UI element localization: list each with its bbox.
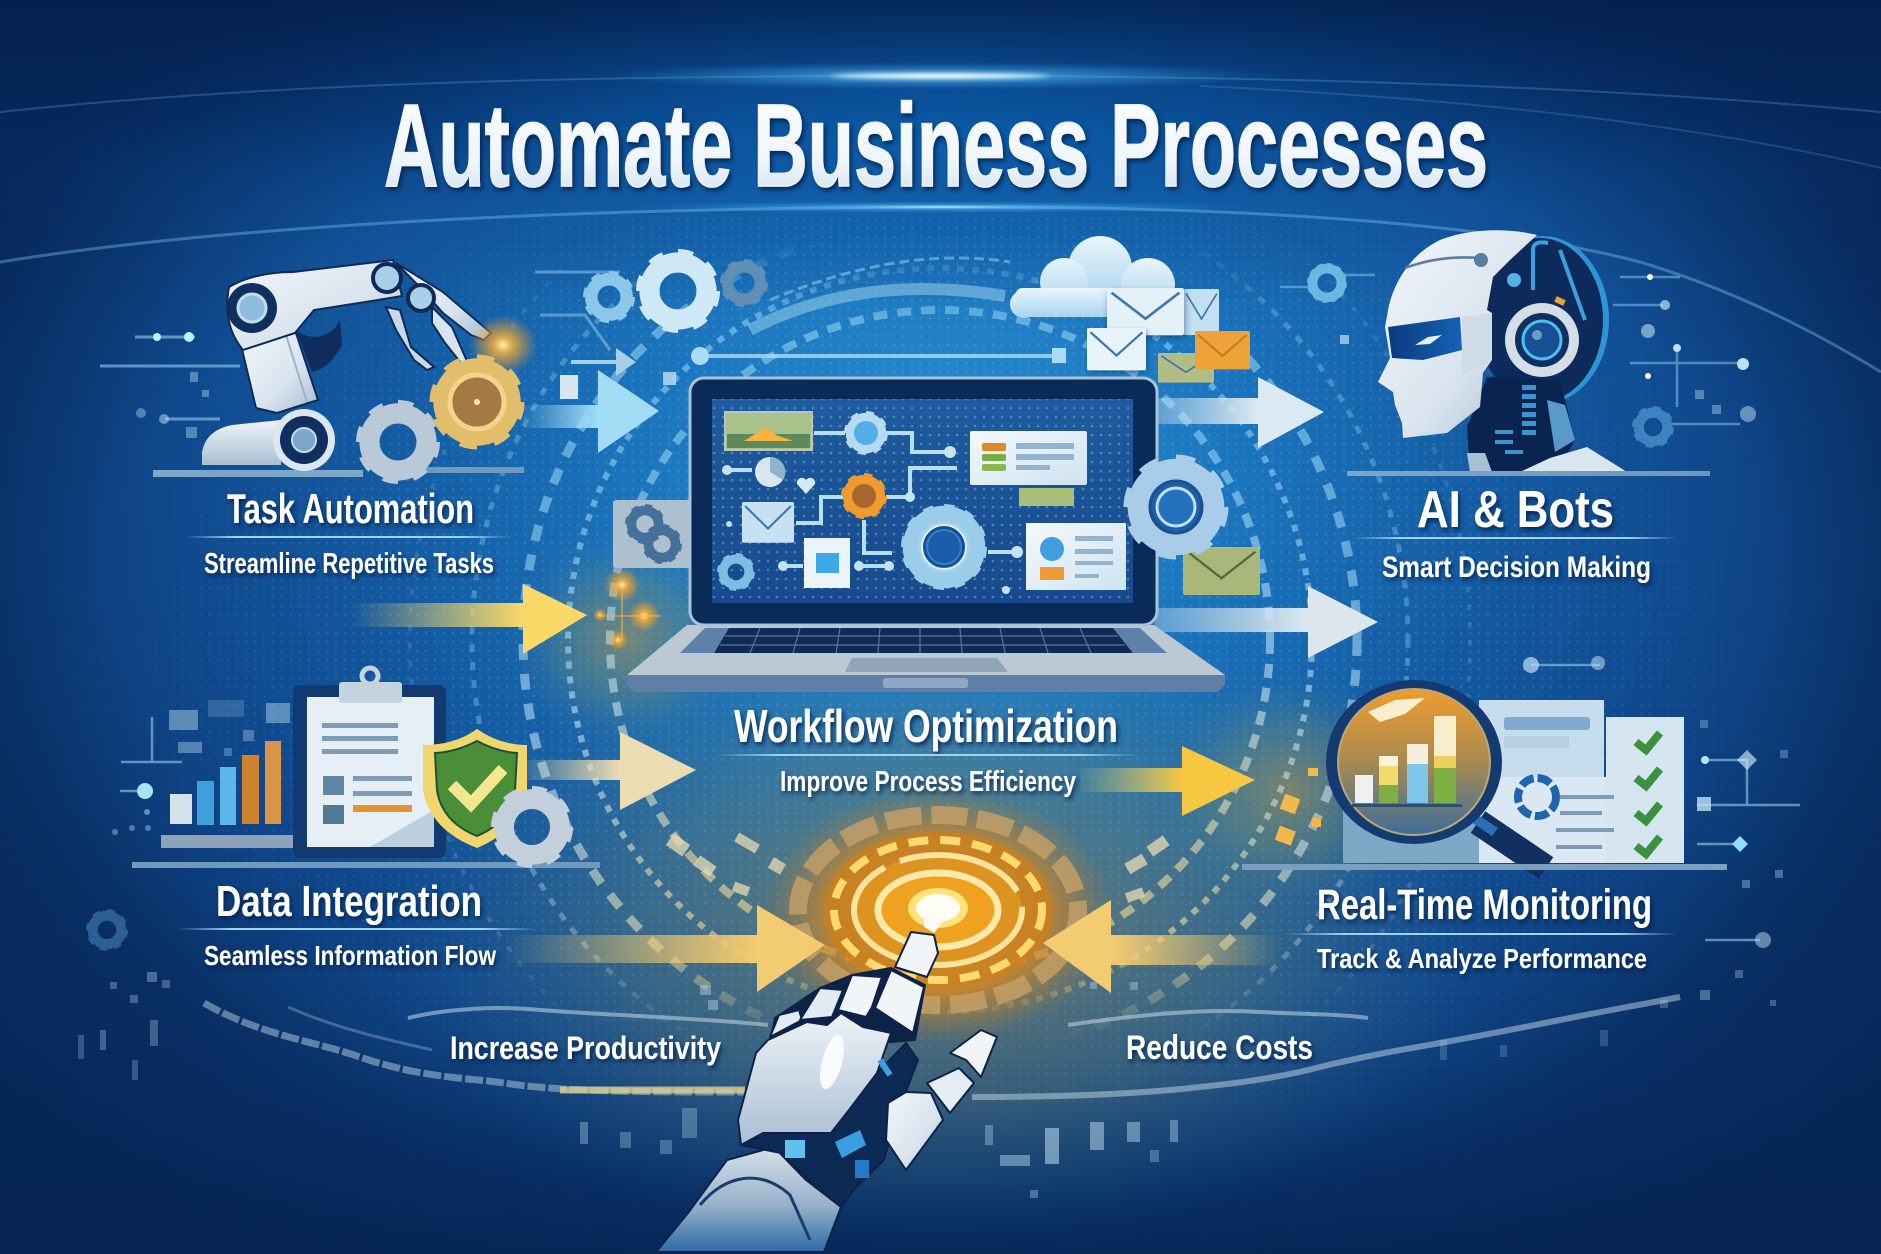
icon: gray gear	[361, 405, 435, 479]
arrow: laptop to AI	[1158, 377, 1324, 448]
icon: cloud and envelopes	[1010, 236, 1250, 383]
panel: gray gear box	[613, 500, 693, 568]
icon: gold gear	[435, 315, 537, 444]
arrow: data integration to workflow	[527, 732, 696, 810]
subtitle: Improve Process Efficiency	[780, 766, 1076, 798]
bar chart	[161, 741, 295, 848]
background scattered squares and circuit lines	[78, 258, 1800, 1198]
icon: gear and envelope on laptop edge	[1130, 461, 1260, 595]
arrow: gold left to laptop	[350, 584, 587, 654]
label: reduce costs: Reduce Costs	[1126, 1029, 1313, 1067]
icon: AI head	[1309, 230, 1671, 472]
screen connectors	[727, 433, 1017, 566]
panel: workflow optimization	[714, 700, 1140, 798]
label: increase productivity: Increase Productivity	[450, 1030, 721, 1066]
panel: data integration	[89, 668, 600, 971]
laptop lid	[690, 378, 1157, 625]
laptop screen	[712, 399, 1133, 603]
heading: Data Integration	[216, 877, 482, 926]
heading: Task Automation	[227, 485, 474, 532]
icon: shield	[423, 729, 527, 848]
document card	[804, 538, 850, 588]
heading: AI & Bots	[1417, 481, 1614, 539]
icon: documents	[1343, 700, 1684, 863]
arrow: productivity into hub	[504, 905, 825, 992]
big screen gear	[905, 508, 983, 586]
panel: real-time monitoring	[1242, 680, 1727, 974]
panel: task automation	[153, 260, 537, 580]
platform	[1347, 471, 1710, 476]
platform	[132, 862, 600, 868]
icon: robot arm	[153, 260, 524, 477]
icon: magnifier with bars	[1326, 680, 1546, 868]
subtitle: Smart Decision Making	[1382, 551, 1651, 584]
heading: Real-Time Monitoring	[1317, 881, 1652, 929]
arrow: workflow to monitoring	[1080, 746, 1255, 816]
icon: gear	[496, 791, 568, 863]
icon: laptop	[627, 378, 1225, 692]
subtitle: Streamline Repetitive Tasks	[204, 548, 494, 580]
arrow: cost reduction into hub	[1043, 900, 1281, 993]
laptop base	[627, 625, 1225, 692]
icon: glowing sparks left of laptop	[593, 567, 660, 650]
platform	[1242, 864, 1727, 870]
hub: golden target	[763, 787, 1113, 1043]
heading: Workflow Optimization	[734, 700, 1118, 752]
background dashed concentric arcs	[408, 250, 1472, 1032]
arrow: laptop to monitoring	[1155, 586, 1378, 658]
gold scatter tiles	[1275, 768, 1321, 846]
decorative gears top centre	[586, 254, 765, 328]
panel: AI and bots	[1309, 230, 1710, 584]
arrow: task automation to laptop	[520, 348, 659, 453]
image card	[725, 412, 812, 450]
icon: clipboard	[293, 668, 446, 858]
subtitle: Seamless Information Flow	[204, 940, 496, 971]
list card	[970, 431, 1087, 485]
profile card	[1026, 523, 1126, 590]
subtitle: Track & Analyze Performance	[1317, 943, 1647, 974]
icon: robot hand	[656, 910, 997, 1252]
